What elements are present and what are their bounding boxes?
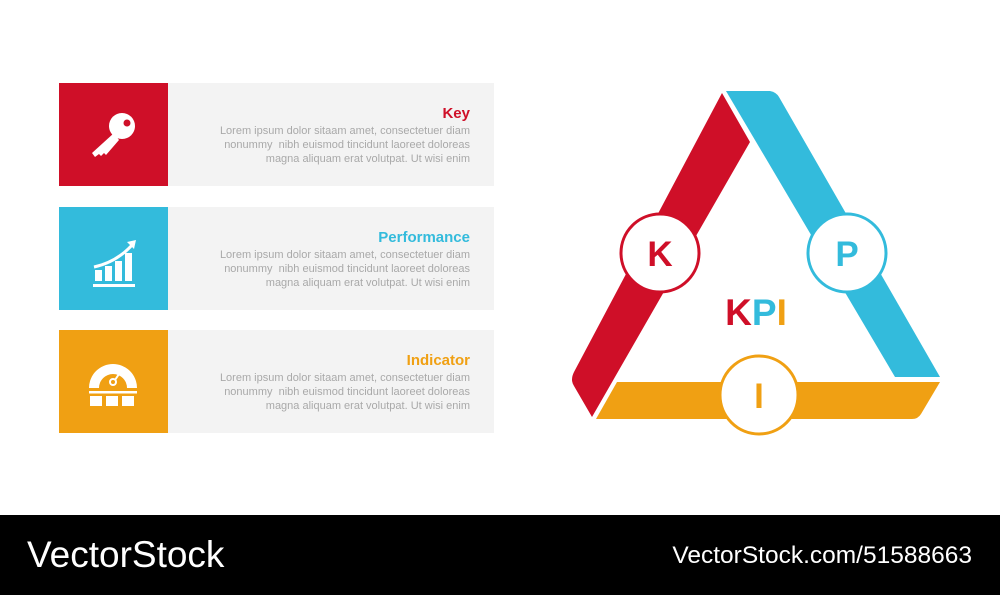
panel: indicator text: Indicator xyxy=(407,352,470,369)
panel: indicator text: nonummy nibh euismod tincidunt laoreet doloreas xyxy=(224,386,470,398)
panel: performance text: Performance xyxy=(378,229,470,246)
circle: I xyxy=(720,356,798,434)
panel: indicator text: Lorem ipsum dolor sitaam amet, consectetuer diam xyxy=(220,372,470,384)
icon: gauge xyxy=(59,330,168,433)
band: orange xyxy=(596,382,940,419)
panel: performance text: nonummy nibh euismod tincidunt laoreet doloreas xyxy=(224,263,470,275)
panel: indicator text: magna aliquam erat volutpat. Ut wisi enim xyxy=(266,400,470,412)
panel: key text: nonummy nibh euismod tincidunt laoreet doloreas xyxy=(224,139,470,151)
center text: KPI: KPI xyxy=(725,292,787,333)
panel: performance text: magna aliquam erat volutpat. Ut wisi enim xyxy=(266,277,470,289)
circle: P: P xyxy=(835,235,859,274)
panel: indicator text xyxy=(168,330,494,433)
panel: key text: magna aliquam erat volutpat. Ut wisi enim xyxy=(266,153,470,165)
circle: I: I xyxy=(754,377,764,416)
circle: K: K xyxy=(647,235,673,274)
footer xyxy=(0,515,1000,595)
panel: key text: Lorem ipsum dolor sitaam amet, consectetuer diam xyxy=(220,125,470,137)
icon: key xyxy=(59,83,168,186)
band: red xyxy=(572,93,750,417)
circle: K xyxy=(621,214,699,292)
panel: performance text xyxy=(168,207,494,310)
panel: performance text: Lorem ipsum dolor sitaam amet, consectetuer diam xyxy=(220,249,470,261)
footer brand: VectorStock xyxy=(27,534,224,575)
panel: key text xyxy=(168,83,494,186)
row: key xyxy=(59,83,494,186)
footer url: VectorStock.com/51588663 xyxy=(672,542,972,569)
row: performance xyxy=(59,207,494,310)
panel: key text: Key xyxy=(442,105,470,122)
row: indicator xyxy=(59,330,494,433)
band: blue xyxy=(726,91,940,377)
icon: chart xyxy=(59,207,168,310)
circle: P xyxy=(808,214,886,292)
